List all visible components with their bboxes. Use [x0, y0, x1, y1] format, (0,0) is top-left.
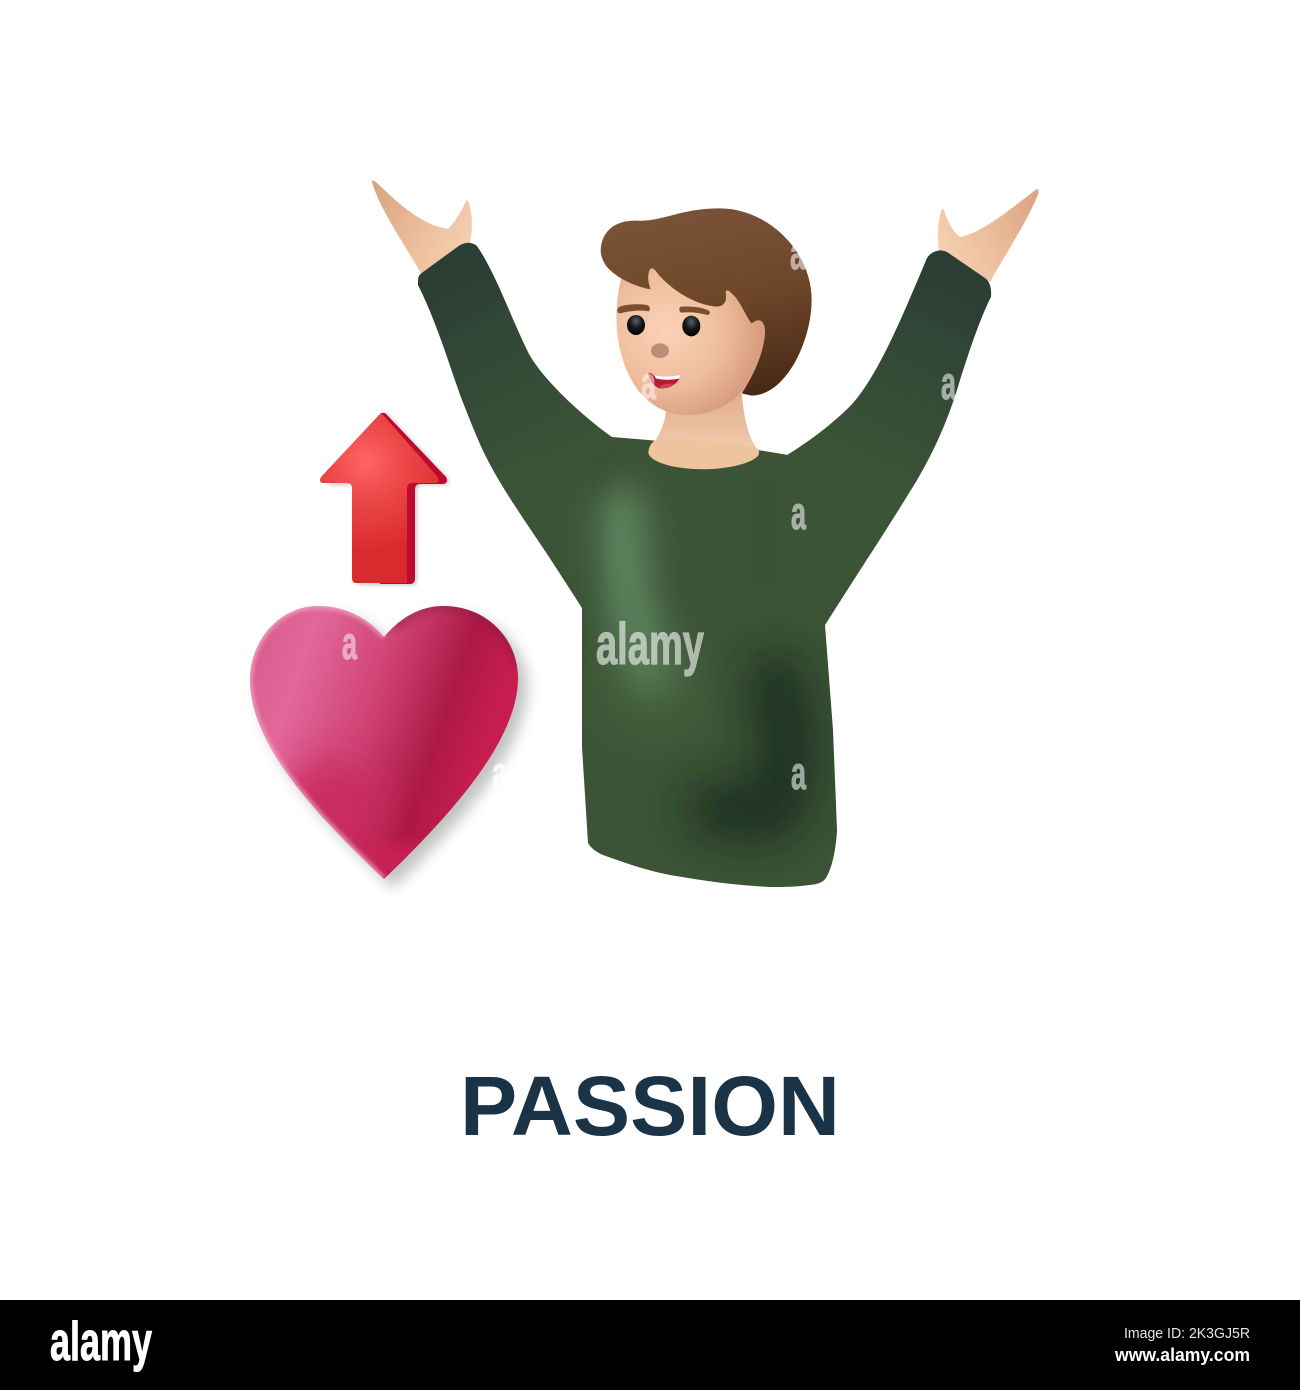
- mouth: [648, 373, 680, 388]
- watermark: alamy center and small marks: a: [790, 227, 805, 279]
- neck: [648, 393, 759, 466]
- sweater: right sleeve: [760, 250, 991, 625]
- icon: right hand: [938, 189, 1038, 282]
- icon: left hand: [372, 180, 472, 275]
- title: PASSION: [460, 1059, 840, 1153]
- person: raised hands: [372, 180, 1038, 887]
- face: [616, 253, 765, 415]
- website: www.alamy.com: [1114, 1345, 1250, 1365]
- nose: [651, 343, 669, 358]
- footer logo: alamy: [50, 1310, 152, 1372]
- icon: up arrow: [320, 413, 449, 585]
- watermark: alamy center and small marks: a: [342, 617, 357, 669]
- figure: passion illustration: [250, 180, 1038, 888]
- collar: [648, 439, 759, 469]
- footer bar: [0, 1300, 1300, 1390]
- head: [601, 208, 812, 469]
- icon: heart: [250, 606, 527, 888]
- watermark: alamy center and small marks: alamy: [596, 612, 704, 677]
- sweater: torso: [493, 437, 917, 887]
- watermark: alamy center and small marks: a: [791, 747, 806, 799]
- watermark: alamy center and small marks: a: [492, 747, 507, 799]
- watermark: alamy center and small marks: a: [941, 357, 956, 409]
- right eye: [682, 316, 700, 336]
- watermark: alamy center and small marks: [342, 227, 956, 799]
- watermark: alamy center and small marks: a: [791, 487, 806, 539]
- hair: [601, 208, 812, 396]
- left eye: [627, 315, 645, 335]
- image id: Image ID: 2K3GJ5R: [1124, 1325, 1250, 1342]
- sweater: left sleeve: [418, 243, 640, 608]
- watermark: alamy center and small marks: a: [641, 357, 656, 409]
- right eyebrow: [679, 306, 710, 315]
- left eyebrow: [617, 304, 650, 313]
